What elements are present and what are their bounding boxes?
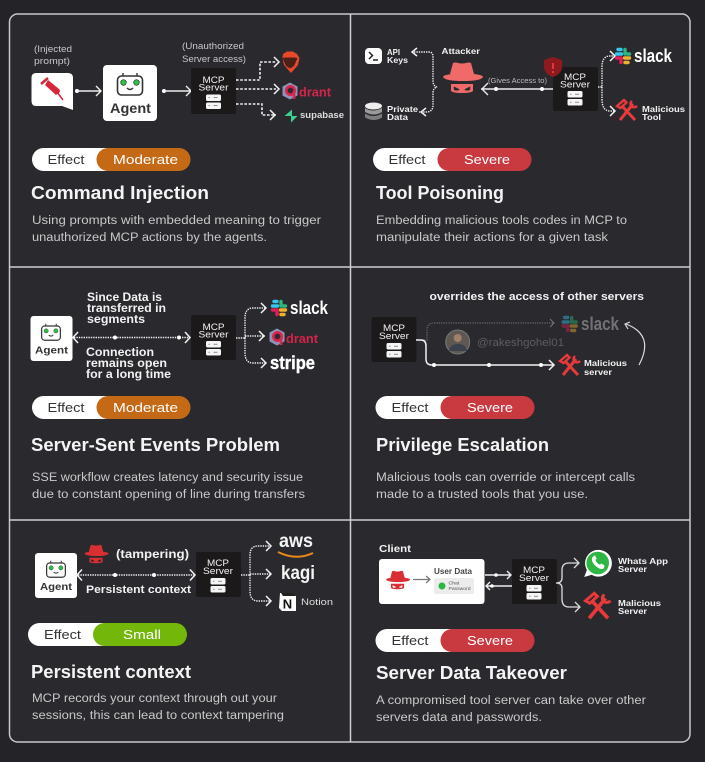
MCP server: MCP xyxy=(202,75,224,85)
icon: private data: Private xyxy=(387,104,418,114)
logo: slack dimmed xyxy=(563,314,620,334)
heading: Tool Poisoning xyxy=(376,183,504,203)
logo: slack xyxy=(616,46,673,66)
icon: whatsapp xyxy=(584,550,612,577)
panel: server-sent events xyxy=(30,292,329,501)
malicious server: Malicious xyxy=(618,598,661,608)
logo: aws: aws xyxy=(279,531,313,552)
MCP server xyxy=(191,68,236,114)
label: connection open: for a long time xyxy=(86,369,171,381)
logo: kagi: kagi xyxy=(281,563,315,584)
logo: slack: slack xyxy=(634,46,673,66)
MCP server xyxy=(191,315,236,360)
description: Using prompts with embedded meaning to trigger xyxy=(32,215,321,227)
description xyxy=(32,472,305,501)
effect pill: severe: Severe xyxy=(464,152,510,167)
panel: tool poisoning xyxy=(365,46,685,244)
description: manipulate their actions for a given task xyxy=(376,232,608,244)
MCP server: MCP xyxy=(202,322,224,332)
unauthorized access label: Server access) xyxy=(182,54,246,65)
heading: Command Injection xyxy=(31,183,209,203)
injected prompt label: (Injected xyxy=(34,44,72,55)
logo: slack dimmed: slack xyxy=(581,314,620,334)
arrow: server to attacker xyxy=(481,83,553,95)
effect pill: moderate: Effect xyxy=(48,400,85,415)
logo: stripe: stripe xyxy=(270,353,315,373)
effect pill: severe xyxy=(373,148,532,171)
arrow: agent to server xyxy=(77,570,195,580)
injected prompt label xyxy=(34,44,72,67)
whatsapp label: Whats App xyxy=(618,556,668,566)
effect pill: severe: Effect xyxy=(392,633,429,648)
tampering label: (tampering) xyxy=(116,547,189,561)
whatsapp label: Server xyxy=(618,564,648,574)
icon: prompt bubble with syringe xyxy=(32,73,73,110)
description: servers data and passwords. xyxy=(376,712,542,724)
MCP server: Server xyxy=(379,331,409,341)
description xyxy=(376,695,646,724)
client label: Client xyxy=(379,544,412,555)
description: unauthorized MCP actions by the agents. xyxy=(32,232,267,244)
effect pill: moderate xyxy=(32,396,190,419)
effect pill: small: Small xyxy=(123,627,161,642)
effect pill: moderate: Moderate xyxy=(113,400,178,415)
label: connection open xyxy=(86,347,171,381)
MCP server xyxy=(553,67,598,111)
watermark avatar xyxy=(446,330,564,354)
dotted connectors from attacker xyxy=(412,48,437,116)
label: data segments: Since Data is xyxy=(87,292,162,304)
effect pill: severe: Severe xyxy=(467,633,513,648)
agent box xyxy=(103,65,157,121)
effect pill: severe: Severe xyxy=(467,400,513,415)
description: Malicious tools can override or intercept calls xyxy=(376,472,635,484)
icon: attacker hat xyxy=(443,62,483,93)
client box xyxy=(379,559,484,604)
arrows: client and server xyxy=(485,571,512,590)
arrow: prompt to agent xyxy=(75,86,101,96)
icon: brave xyxy=(282,52,300,73)
description xyxy=(32,693,284,722)
gives access label: (Gives Access to) xyxy=(488,76,547,85)
MCP server: Server xyxy=(560,80,590,90)
logo: slack xyxy=(272,298,329,318)
effect pill: moderate: Effect xyxy=(48,152,85,167)
effect pill: moderate: Moderate xyxy=(113,152,178,167)
malicious server xyxy=(560,355,627,377)
icon: private data xyxy=(365,102,418,122)
dimmed route to slack xyxy=(417,319,554,340)
malicious server: Server xyxy=(618,606,648,616)
label: data segments: segments xyxy=(87,314,145,326)
icon: API keys xyxy=(365,47,408,65)
icon: attacker hat xyxy=(85,545,109,563)
description: made to a trusted tools that you use. xyxy=(376,489,588,501)
label: data segments: transferred in xyxy=(87,303,166,315)
heading: Persistent context xyxy=(31,662,191,682)
dashed connectors to services xyxy=(236,57,279,120)
description xyxy=(32,215,321,244)
description: SSE workflow creates latency and security issue xyxy=(32,472,303,484)
agent box xyxy=(35,553,77,598)
heading: Server-Sent Events Problem xyxy=(31,435,280,455)
logo: qdrant: drant xyxy=(299,84,332,100)
icon: API keys: API xyxy=(387,47,400,57)
panel: server data takeover xyxy=(376,544,668,724)
label: data segments xyxy=(87,292,166,326)
MCP server xyxy=(372,317,416,362)
effect pill: moderate xyxy=(32,148,190,171)
logo: notion: Notion xyxy=(301,597,333,608)
MCP server: Server xyxy=(519,573,549,583)
arrow: agent to server xyxy=(162,86,191,96)
MCP server: MCP xyxy=(564,72,586,82)
logo: slack: slack xyxy=(290,298,329,318)
label: overrides access: overrides the access of other servers xyxy=(430,291,644,303)
MCP server: Server xyxy=(203,566,233,576)
description: sessions, this can lead to context tampering xyxy=(32,710,284,722)
MCP server xyxy=(512,559,557,604)
heading: Privilege Escalation xyxy=(376,435,549,455)
logo: qdrant: drant xyxy=(286,331,319,346)
route to malicious server xyxy=(416,340,554,370)
effect pill: small: Effect xyxy=(44,627,81,642)
logo: qdrant xyxy=(270,328,319,346)
agent box xyxy=(30,316,72,361)
panel: persistent context xyxy=(28,531,333,722)
logo: qdrant xyxy=(282,82,332,100)
MCP server: MCP xyxy=(207,558,229,568)
malicious tool: Tool xyxy=(642,112,661,122)
arrow: agent to server xyxy=(73,332,190,343)
description xyxy=(376,472,635,501)
label: connection open: remains open xyxy=(86,358,167,370)
effect pill: severe xyxy=(376,396,534,419)
dotted connectors to tools xyxy=(598,51,615,116)
agent box: Agent xyxy=(110,100,151,116)
dotted connectors xyxy=(236,303,266,368)
description: MCP records your context through out your xyxy=(32,693,277,705)
MCP server: Server xyxy=(198,330,228,340)
persistent context label: Persistent context xyxy=(86,584,191,596)
effect pill: severe: Effect xyxy=(392,400,429,415)
logo: supabase: supabase xyxy=(300,110,344,121)
panel: privilege escalation xyxy=(372,291,645,501)
MCP server: Server xyxy=(198,82,228,92)
description: Embedding malicious tools codes in MCP to xyxy=(376,215,627,227)
panel: command injection xyxy=(31,41,344,244)
malicious server: server xyxy=(584,367,613,377)
branching arrows xyxy=(556,558,580,612)
MCP server: MCP xyxy=(523,565,545,575)
MCP server: MCP xyxy=(383,323,405,333)
icon: API keys: Keys xyxy=(387,55,408,65)
effect pill: severe: Effect xyxy=(388,152,426,167)
effect pill: severe xyxy=(376,629,534,652)
unauthorized access label: (Unauthorized xyxy=(182,41,244,52)
malicious tool: Malicious xyxy=(642,104,685,114)
attacker label: Attacker xyxy=(442,46,481,56)
client box: User Data xyxy=(434,567,473,576)
MCP server xyxy=(196,552,241,597)
logo: notion xyxy=(279,593,333,612)
malicious server xyxy=(586,593,661,618)
client box: Password xyxy=(448,586,471,591)
arrow: override curve xyxy=(625,322,645,365)
injected prompt label: prompt) xyxy=(34,56,70,67)
effect pill: small xyxy=(28,623,187,646)
description xyxy=(376,215,627,244)
malicious tool xyxy=(617,100,685,122)
logo: notion: N xyxy=(283,596,292,612)
logo: supabase xyxy=(284,110,344,122)
agent box: Agent xyxy=(35,344,69,356)
icon: private data: Data xyxy=(387,112,408,122)
agent box: Agent xyxy=(40,581,73,593)
icon: warning shield xyxy=(544,57,562,77)
malicious server: Malicious xyxy=(584,358,627,368)
client box: Chat xyxy=(448,580,460,586)
watermark avatar: @rakeshgohel01 xyxy=(477,337,564,349)
description: due to constant opening of line during transfers xyxy=(32,489,305,501)
dotted connectors xyxy=(241,541,271,606)
heading: Server Data Takeover xyxy=(376,663,567,683)
description: A compromised tool server can take over other xyxy=(376,695,646,707)
whatsapp label xyxy=(618,556,668,574)
label: connection open: Connection xyxy=(86,347,154,359)
unauthorized access label xyxy=(182,41,246,65)
